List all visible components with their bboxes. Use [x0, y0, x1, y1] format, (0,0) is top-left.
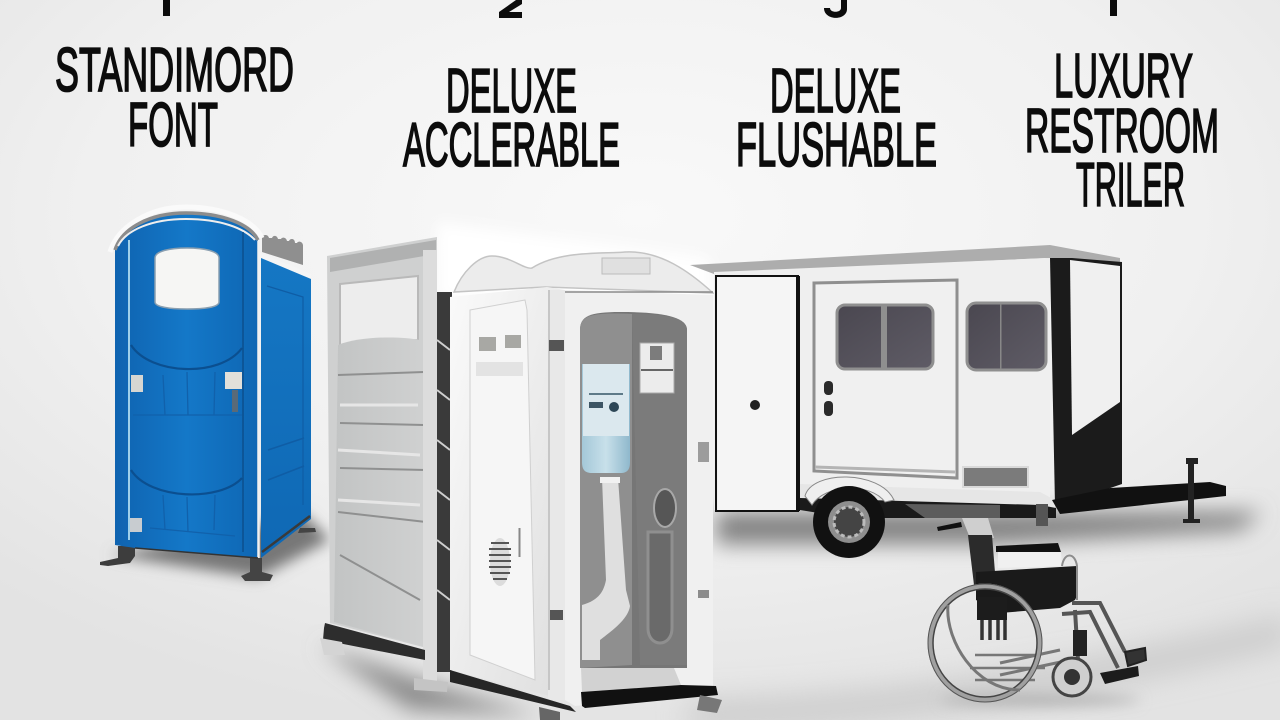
interior	[580, 312, 687, 668]
urinal pipe and bowl	[582, 478, 630, 660]
vent	[963, 467, 1028, 487]
illustration: open deluxe toilet	[320, 237, 722, 720]
roof	[454, 252, 713, 293]
heading: luxury trailer	[1025, 42, 1219, 220]
big wheel	[930, 586, 1040, 700]
illustration: luxury restroom trailer	[690, 245, 1226, 558]
heading: standard: STANDIMORD	[55, 36, 294, 105]
shell	[690, 245, 1120, 274]
vents/labels	[479, 337, 496, 351]
feet	[100, 546, 135, 566]
heading: deluxe flushable	[736, 57, 937, 180]
hinges	[549, 340, 564, 620]
gap strip	[437, 292, 452, 672]
latch plates	[131, 375, 143, 392]
sign	[640, 343, 674, 393]
blue tank	[582, 364, 630, 473]
heading: standard: FONT	[128, 91, 218, 160]
step numbers	[163, 0, 1117, 18]
heading: deluxe flushable: FLUSHABLE	[736, 111, 937, 180]
side panel	[261, 258, 311, 558]
heading: standard	[55, 36, 294, 160]
illustration: blue portable toilet	[100, 207, 316, 581]
door	[814, 280, 957, 478]
fender	[805, 477, 894, 505]
illustration: wheelchair	[928, 518, 1146, 702]
windows	[837, 305, 933, 369]
body side	[450, 287, 565, 700]
frame	[1062, 603, 1125, 668]
open door	[327, 237, 437, 682]
heading: deluxe flushable: DELUXE	[770, 57, 901, 126]
heading: deluxe accessible: ACCLERABLE	[403, 111, 620, 180]
push handle and post	[937, 522, 962, 531]
heading: deluxe accessible: DELUXE	[446, 57, 577, 126]
right wall fixture	[648, 532, 672, 643]
window	[155, 248, 219, 309]
wheel	[813, 486, 885, 558]
roof vents	[262, 235, 303, 265]
door moulding	[131, 345, 242, 494]
door frame	[565, 290, 713, 706]
heading: deluxe accessible	[403, 57, 620, 180]
front	[115, 214, 258, 558]
skirt and chassis	[800, 484, 1055, 508]
caster	[1053, 658, 1091, 696]
backrest	[996, 543, 1061, 552]
seat slats	[977, 597, 1007, 620]
floor and base	[581, 668, 681, 692]
end	[1050, 258, 1122, 505]
footrests	[1100, 666, 1139, 684]
